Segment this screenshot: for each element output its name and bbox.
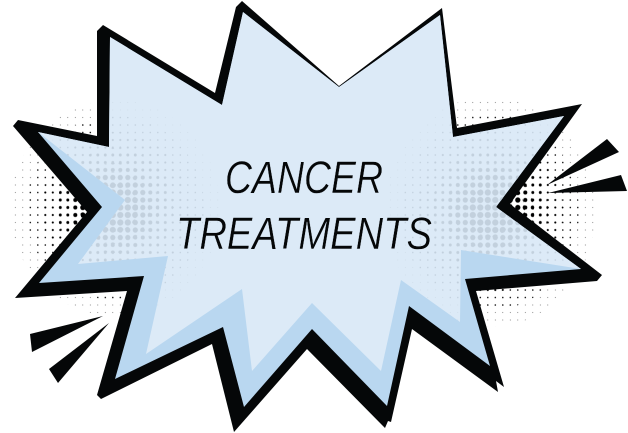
- burst light blue face: [38, 12, 581, 371]
- title: Cancer Treatments: TREATMENTS: [176, 208, 432, 259]
- icon: left action rays: [30, 316, 109, 383]
- icon: right action rays: [547, 139, 627, 193]
- title: Cancer Treatments: [176, 152, 432, 259]
- halftone background: black dots: [10, 97, 595, 327]
- burst blue shadow band: [38, 12, 581, 407]
- title: Cancer Treatments: CANCER: [225, 152, 383, 203]
- halftone on burst face: grey dots: [52, 102, 578, 320]
